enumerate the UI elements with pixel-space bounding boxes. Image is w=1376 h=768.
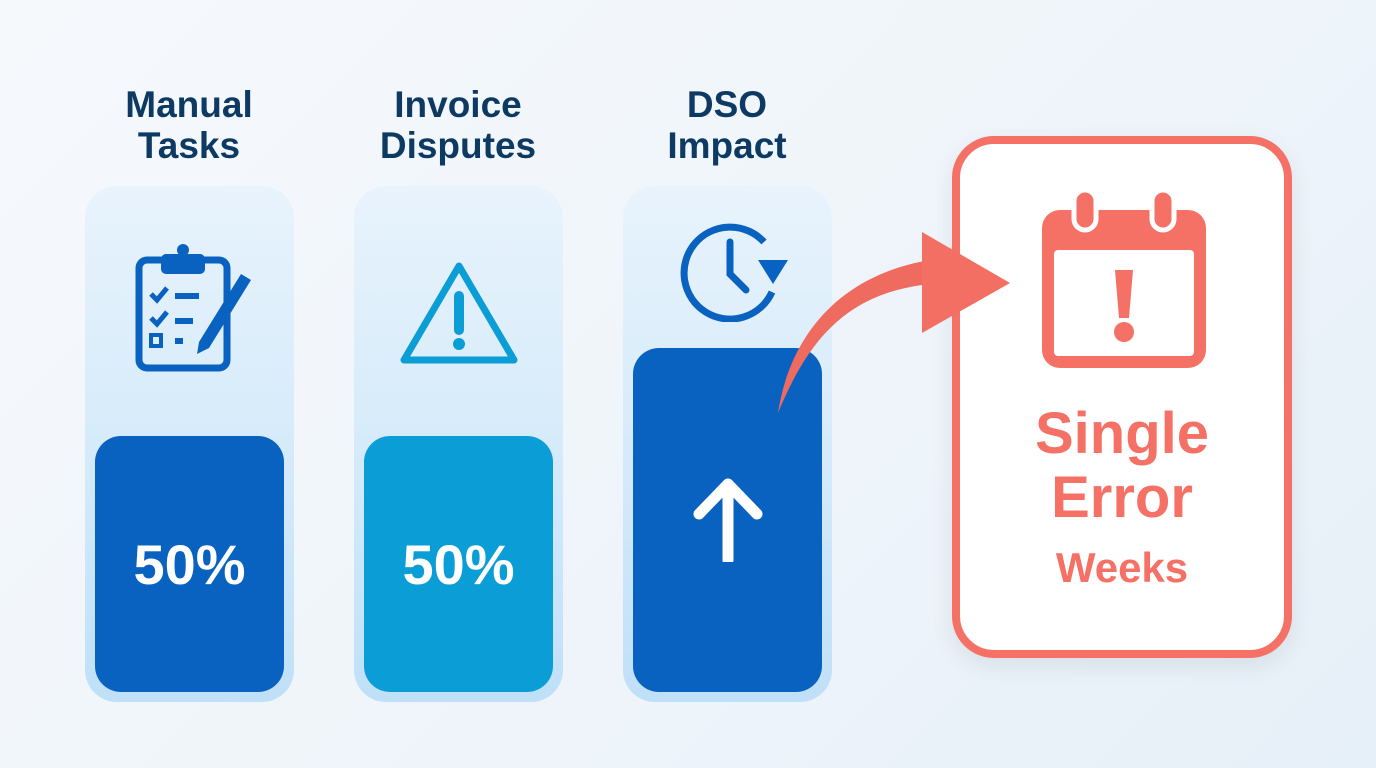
heading: invoice disputes: Invoice (394, 84, 522, 125)
bar: 50%: 50% (402, 532, 515, 596)
heading: manual tasks: Manual (125, 84, 253, 125)
card: single error (952, 136, 1292, 658)
arrow: curved red (778, 232, 1010, 413)
text: single error: Error (1051, 465, 1193, 530)
text: single error (1035, 401, 1209, 530)
panel: invoice disputes (354, 186, 563, 702)
heading: invoice disputes: Disputes (380, 125, 536, 166)
bar: 50% (364, 436, 553, 692)
icon: calendar alert (1042, 192, 1206, 368)
bar: 50%: 50% (133, 532, 246, 596)
text: single error: Single (1035, 401, 1209, 466)
icon: clipboard (136, 244, 251, 372)
icon: clock (680, 224, 788, 322)
icon: warning (400, 262, 518, 364)
text: weeks: Weeks (1056, 544, 1188, 591)
heading: manual tasks (125, 84, 253, 166)
heading: invoice disputes (380, 84, 536, 166)
heading: dso impact (667, 84, 787, 166)
bar: up arrow (633, 348, 822, 692)
panel: dso impact (623, 186, 832, 702)
heading: dso impact: Impact (667, 125, 787, 166)
heading: manual tasks: Tasks (138, 125, 240, 166)
heading: dso impact: DSO (687, 84, 767, 125)
panel: manual tasks (85, 186, 294, 702)
bar: 50% (95, 436, 284, 692)
